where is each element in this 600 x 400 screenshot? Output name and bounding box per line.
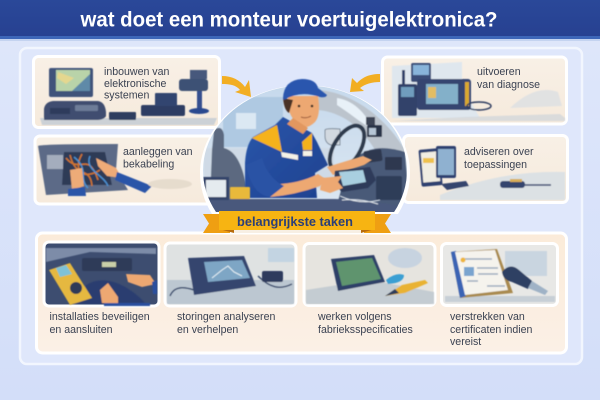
yellow shoulder panels	[252, 125, 312, 152]
text: verstrekken van certificaten indien vereist: verstrekken van	[450, 311, 525, 323]
header banner	[0, 0, 600, 41]
icon: phone tablet and connector	[418, 146, 565, 200]
dashcam	[366, 117, 375, 125]
text: uitvoeren van diagnose: uitvoeren	[477, 66, 521, 78]
text: aanleggen van bekabeling: aanleggen van	[123, 146, 193, 158]
title: wat doet een monteur voertuigelektronica?	[80, 8, 498, 32]
car window frame	[318, 90, 404, 152]
steering wheel	[327, 123, 367, 167]
card: installaties beveiligen en aansluiten	[44, 242, 159, 306]
head	[288, 96, 319, 127]
medallion: technician in car	[200, 79, 410, 215]
text: installaties beveiligen en aansluiten: installaties beveiligen	[50, 311, 150, 323]
card: werken volgens fabrieksspecificaties	[304, 244, 435, 306]
text: aanleggen van bekabeling: bekabeling	[123, 158, 174, 170]
outer frame	[20, 48, 582, 364]
text: storingen analyseren en verhelpen: storingen analyseren	[177, 311, 275, 323]
icon: navigation screen and head unit	[40, 68, 217, 125]
icon: certificate and key	[445, 249, 555, 302]
text: inbouwen van elektronische systemen: systemen	[104, 90, 149, 102]
text: adviseren over toepassingen: adviseren over	[464, 146, 534, 158]
text: inbouwen van elektronische systemen: inbouwen van	[104, 66, 169, 78]
seat	[210, 128, 248, 200]
icon: analyser with graph	[167, 248, 294, 304]
card: storingen analyseren en verhelpen	[165, 243, 296, 306]
technician	[245, 79, 372, 198]
arm to dashboard	[327, 156, 372, 175]
arrow: right to centre	[350, 74, 380, 92]
ribbon: belangrijkste taken: belangrijkste taken	[237, 214, 353, 229]
icon: multimeter	[46, 248, 157, 306]
desk with cables, clipboard and yellow box	[200, 177, 400, 215]
icon: circuit board and probe	[306, 248, 434, 304]
arm to tablet	[270, 174, 327, 197]
panel: adviseren over toepassingen	[404, 136, 568, 202]
tablet	[320, 167, 376, 193]
text: installaties beveiligen en aansluiten: en aansluiten	[50, 324, 113, 336]
arrow: left to centre	[222, 76, 251, 97]
text: uitvoeren van diagnose: van diagnose	[477, 79, 540, 91]
text: werken volgens fabrieksspecificaties: fabrieksspecificaties	[318, 324, 413, 336]
icon: dashboard wiring and hands	[38, 144, 192, 196]
text: storingen analyseren en verhelpen: en verhelpen	[177, 324, 238, 336]
card: verstrekken van certificaten indien vereist	[442, 244, 558, 306]
text: verstrekken van certificaten indien vereist: vereist	[450, 336, 481, 348]
shirt	[245, 117, 328, 198]
text: inbouwen van elektronische systemen: elektronische	[104, 78, 167, 90]
cap	[283, 79, 327, 100]
text: verstrekken van certificaten indien vereist: certificaten indien	[450, 324, 533, 336]
text: werken volgens fabrieksspecificaties: werken volgens	[317, 311, 392, 323]
panel: belangrijkste taken task row	[36, 233, 566, 353]
ribbon: belangrijkste taken	[203, 211, 391, 233]
panel: aanleggen van bekabeling	[35, 136, 217, 204]
panel: inbouwen van elektronische systemen	[34, 56, 220, 128]
panel: uitvoeren van diagnose	[382, 57, 566, 124]
icon: diagnostic devices	[390, 62, 565, 121]
dashboard	[335, 148, 410, 212]
text: adviseren over toepassingen: toepassingen	[464, 159, 527, 171]
